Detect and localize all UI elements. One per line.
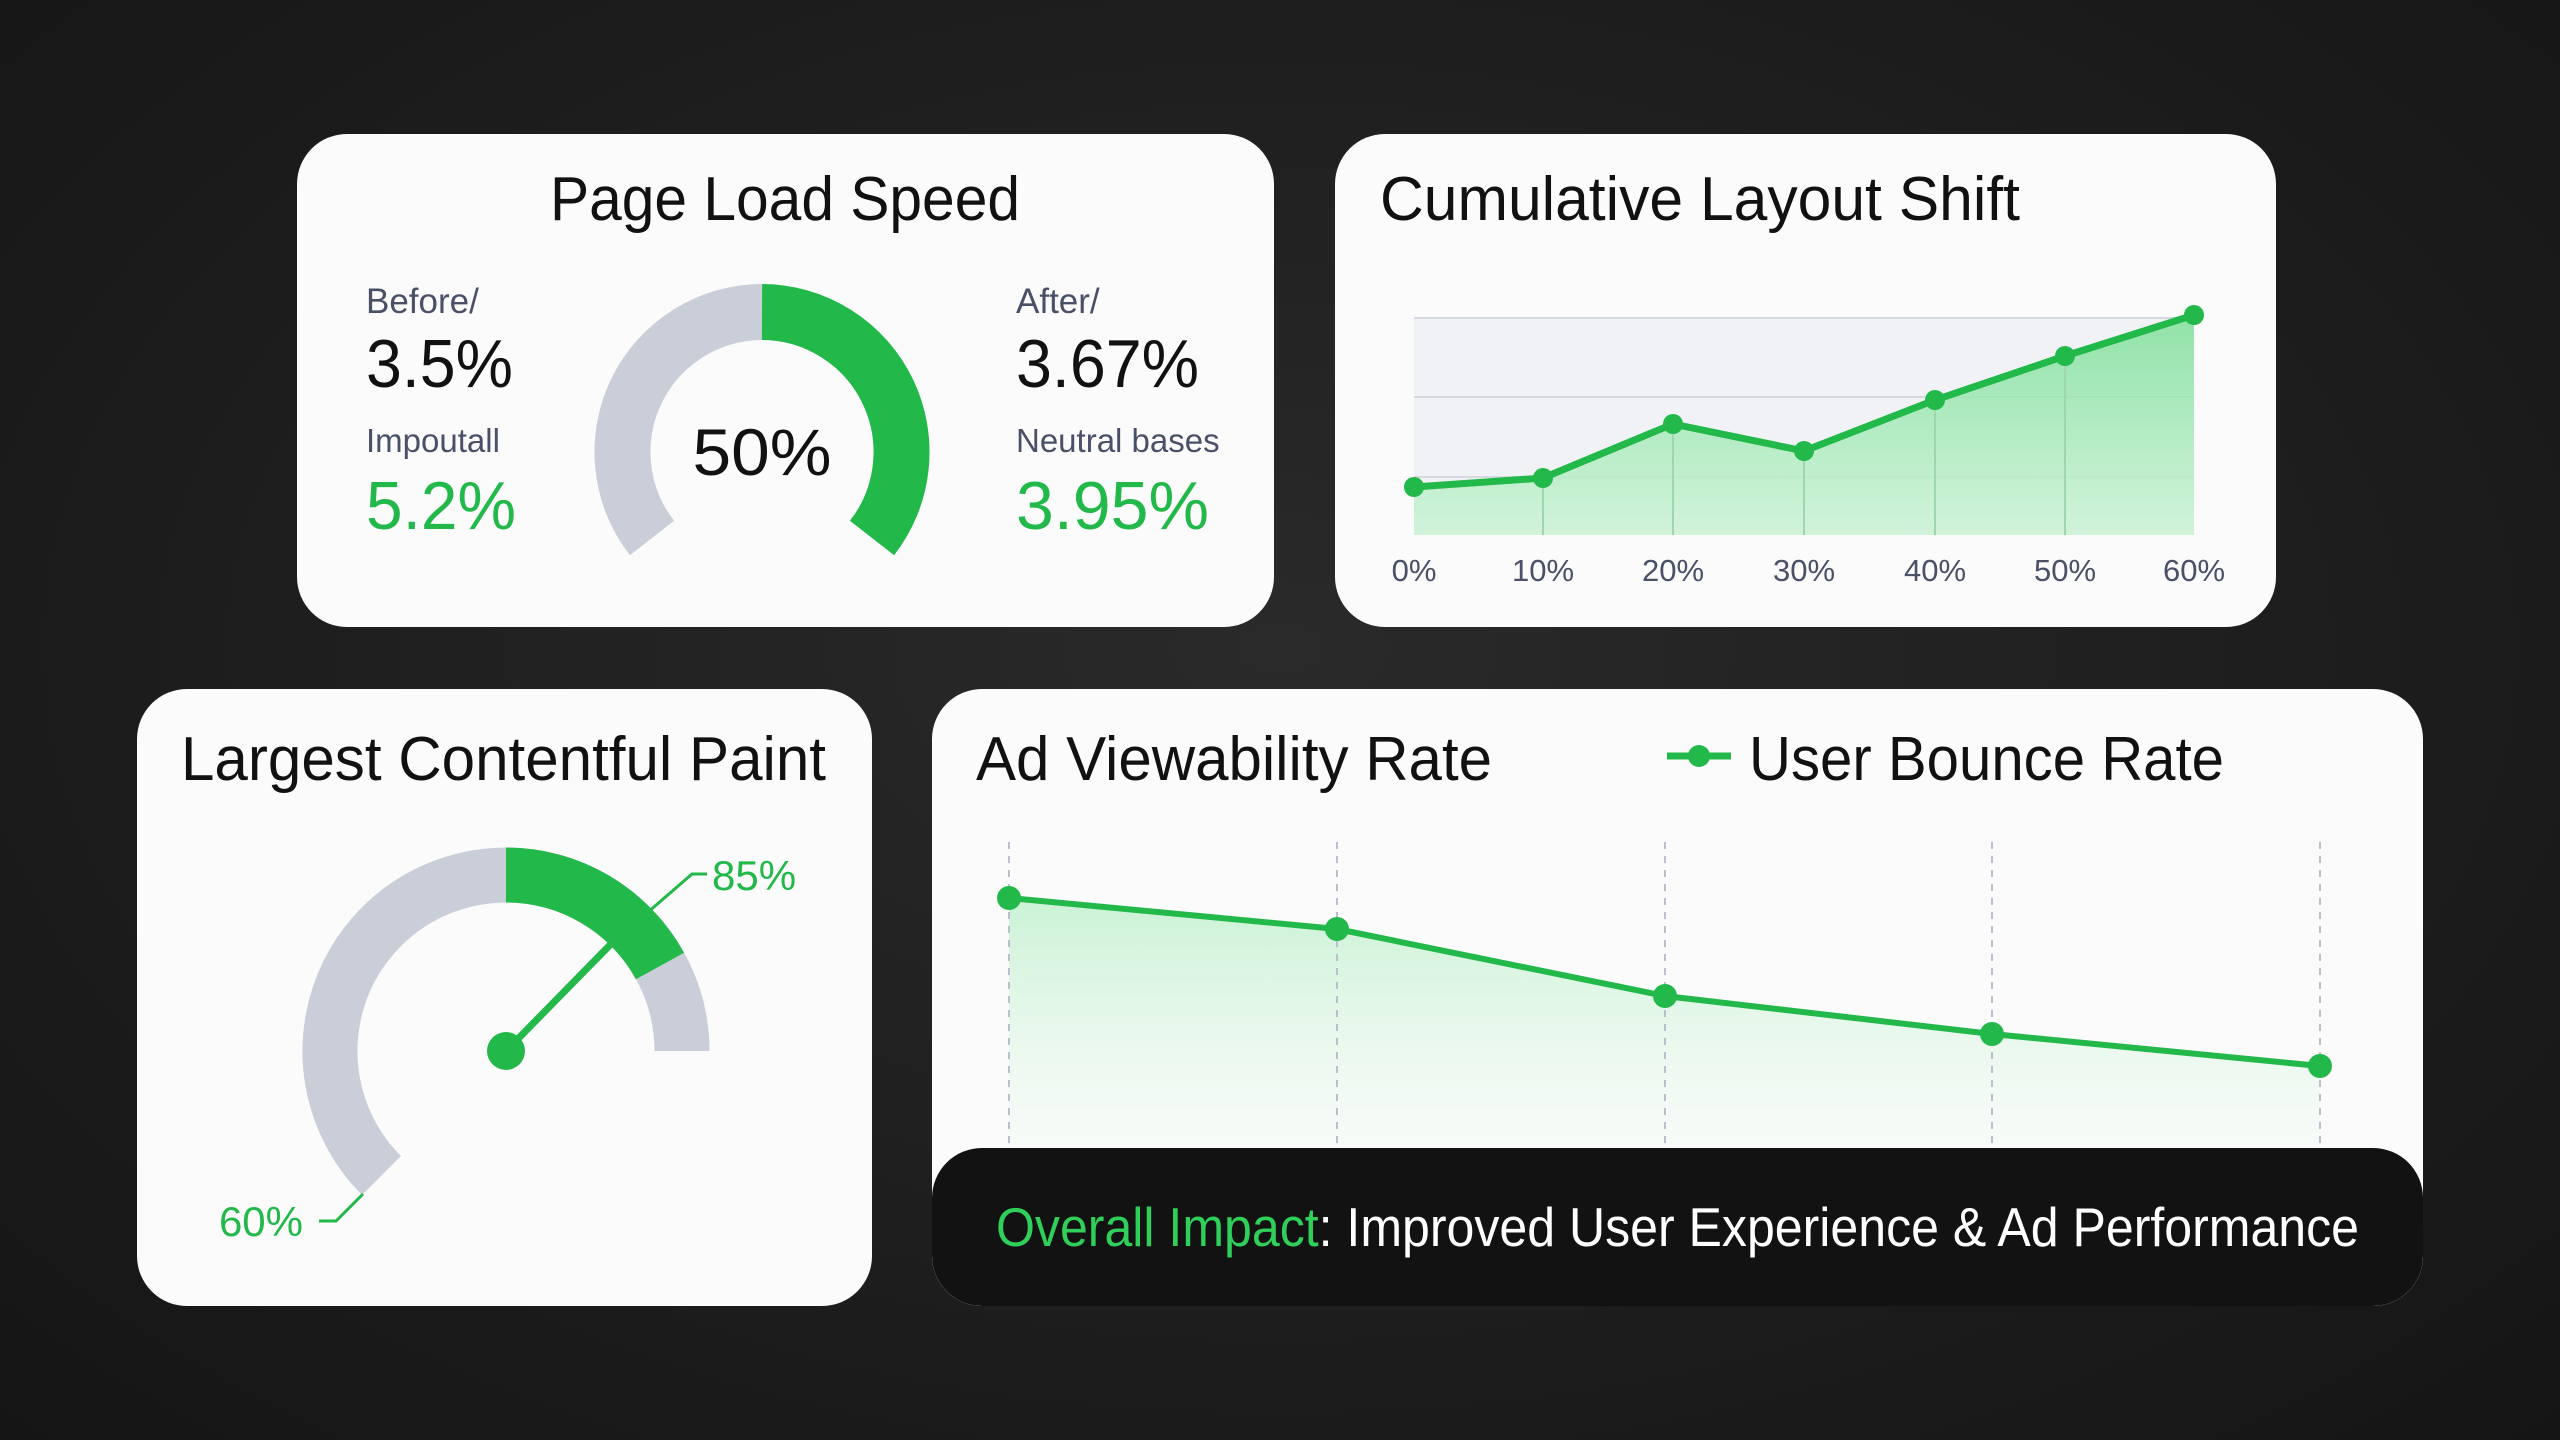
text block: before: 3.5% (366, 326, 513, 402)
line chart: CLS: 60% (2163, 553, 2225, 588)
line chart: CLS: 50% (2034, 553, 2096, 588)
panel: ad viewability rate (932, 689, 2423, 1306)
heading: largest contentful paint: Largest Contentful Paint (181, 725, 826, 794)
gauge: LCP: 85% (712, 852, 796, 899)
legend: user bounce rate: User Bounce Rate (1749, 725, 2224, 794)
line chart: CLS: 40% (1904, 553, 1966, 588)
gauge: LCP: 60% (219, 1198, 303, 1245)
text block: before: 5.2% (366, 468, 516, 544)
heading: ad viewability rate: Ad Viewability Rate (976, 725, 1492, 794)
text block: after: After/ (1016, 282, 1100, 321)
line chart: CLS: 10% (1512, 553, 1574, 588)
text block: after: 3.67% (1016, 326, 1199, 402)
callout: overall impact (932, 1148, 2423, 1306)
panel: page load speed (297, 134, 1274, 627)
heading: cumulative layout shift: Cumulative Layout Shift (1380, 165, 2020, 234)
heading: page load speed: Page Load Speed (550, 165, 1020, 234)
panel: cumulative layout shift (1335, 134, 2276, 627)
line chart: bounce rate (997, 842, 2332, 1148)
text block: after: 3.95% (1016, 468, 1209, 544)
panel: largest contentful paint (137, 689, 872, 1306)
line chart: CLS: 20% (1642, 553, 1704, 588)
text block: before: Before/ (366, 282, 479, 321)
gauge: 50% (622, 312, 902, 538)
text block: before: Impoutall (366, 422, 500, 459)
gauge: 50%: 50% (692, 415, 832, 489)
line chart: CLS: 0% (1392, 553, 1436, 588)
gauge: LCP (219, 852, 796, 1245)
text block: after (1016, 282, 1220, 544)
text block: after: Neutral bases (1016, 422, 1220, 459)
line chart: CLS: 30% (1773, 553, 1835, 588)
text block: before (366, 282, 516, 544)
callout: overall impact: Overall Impact: Improved User Experience & Ad Performance (996, 1196, 2359, 1258)
line chart: CLS (1392, 305, 2225, 588)
